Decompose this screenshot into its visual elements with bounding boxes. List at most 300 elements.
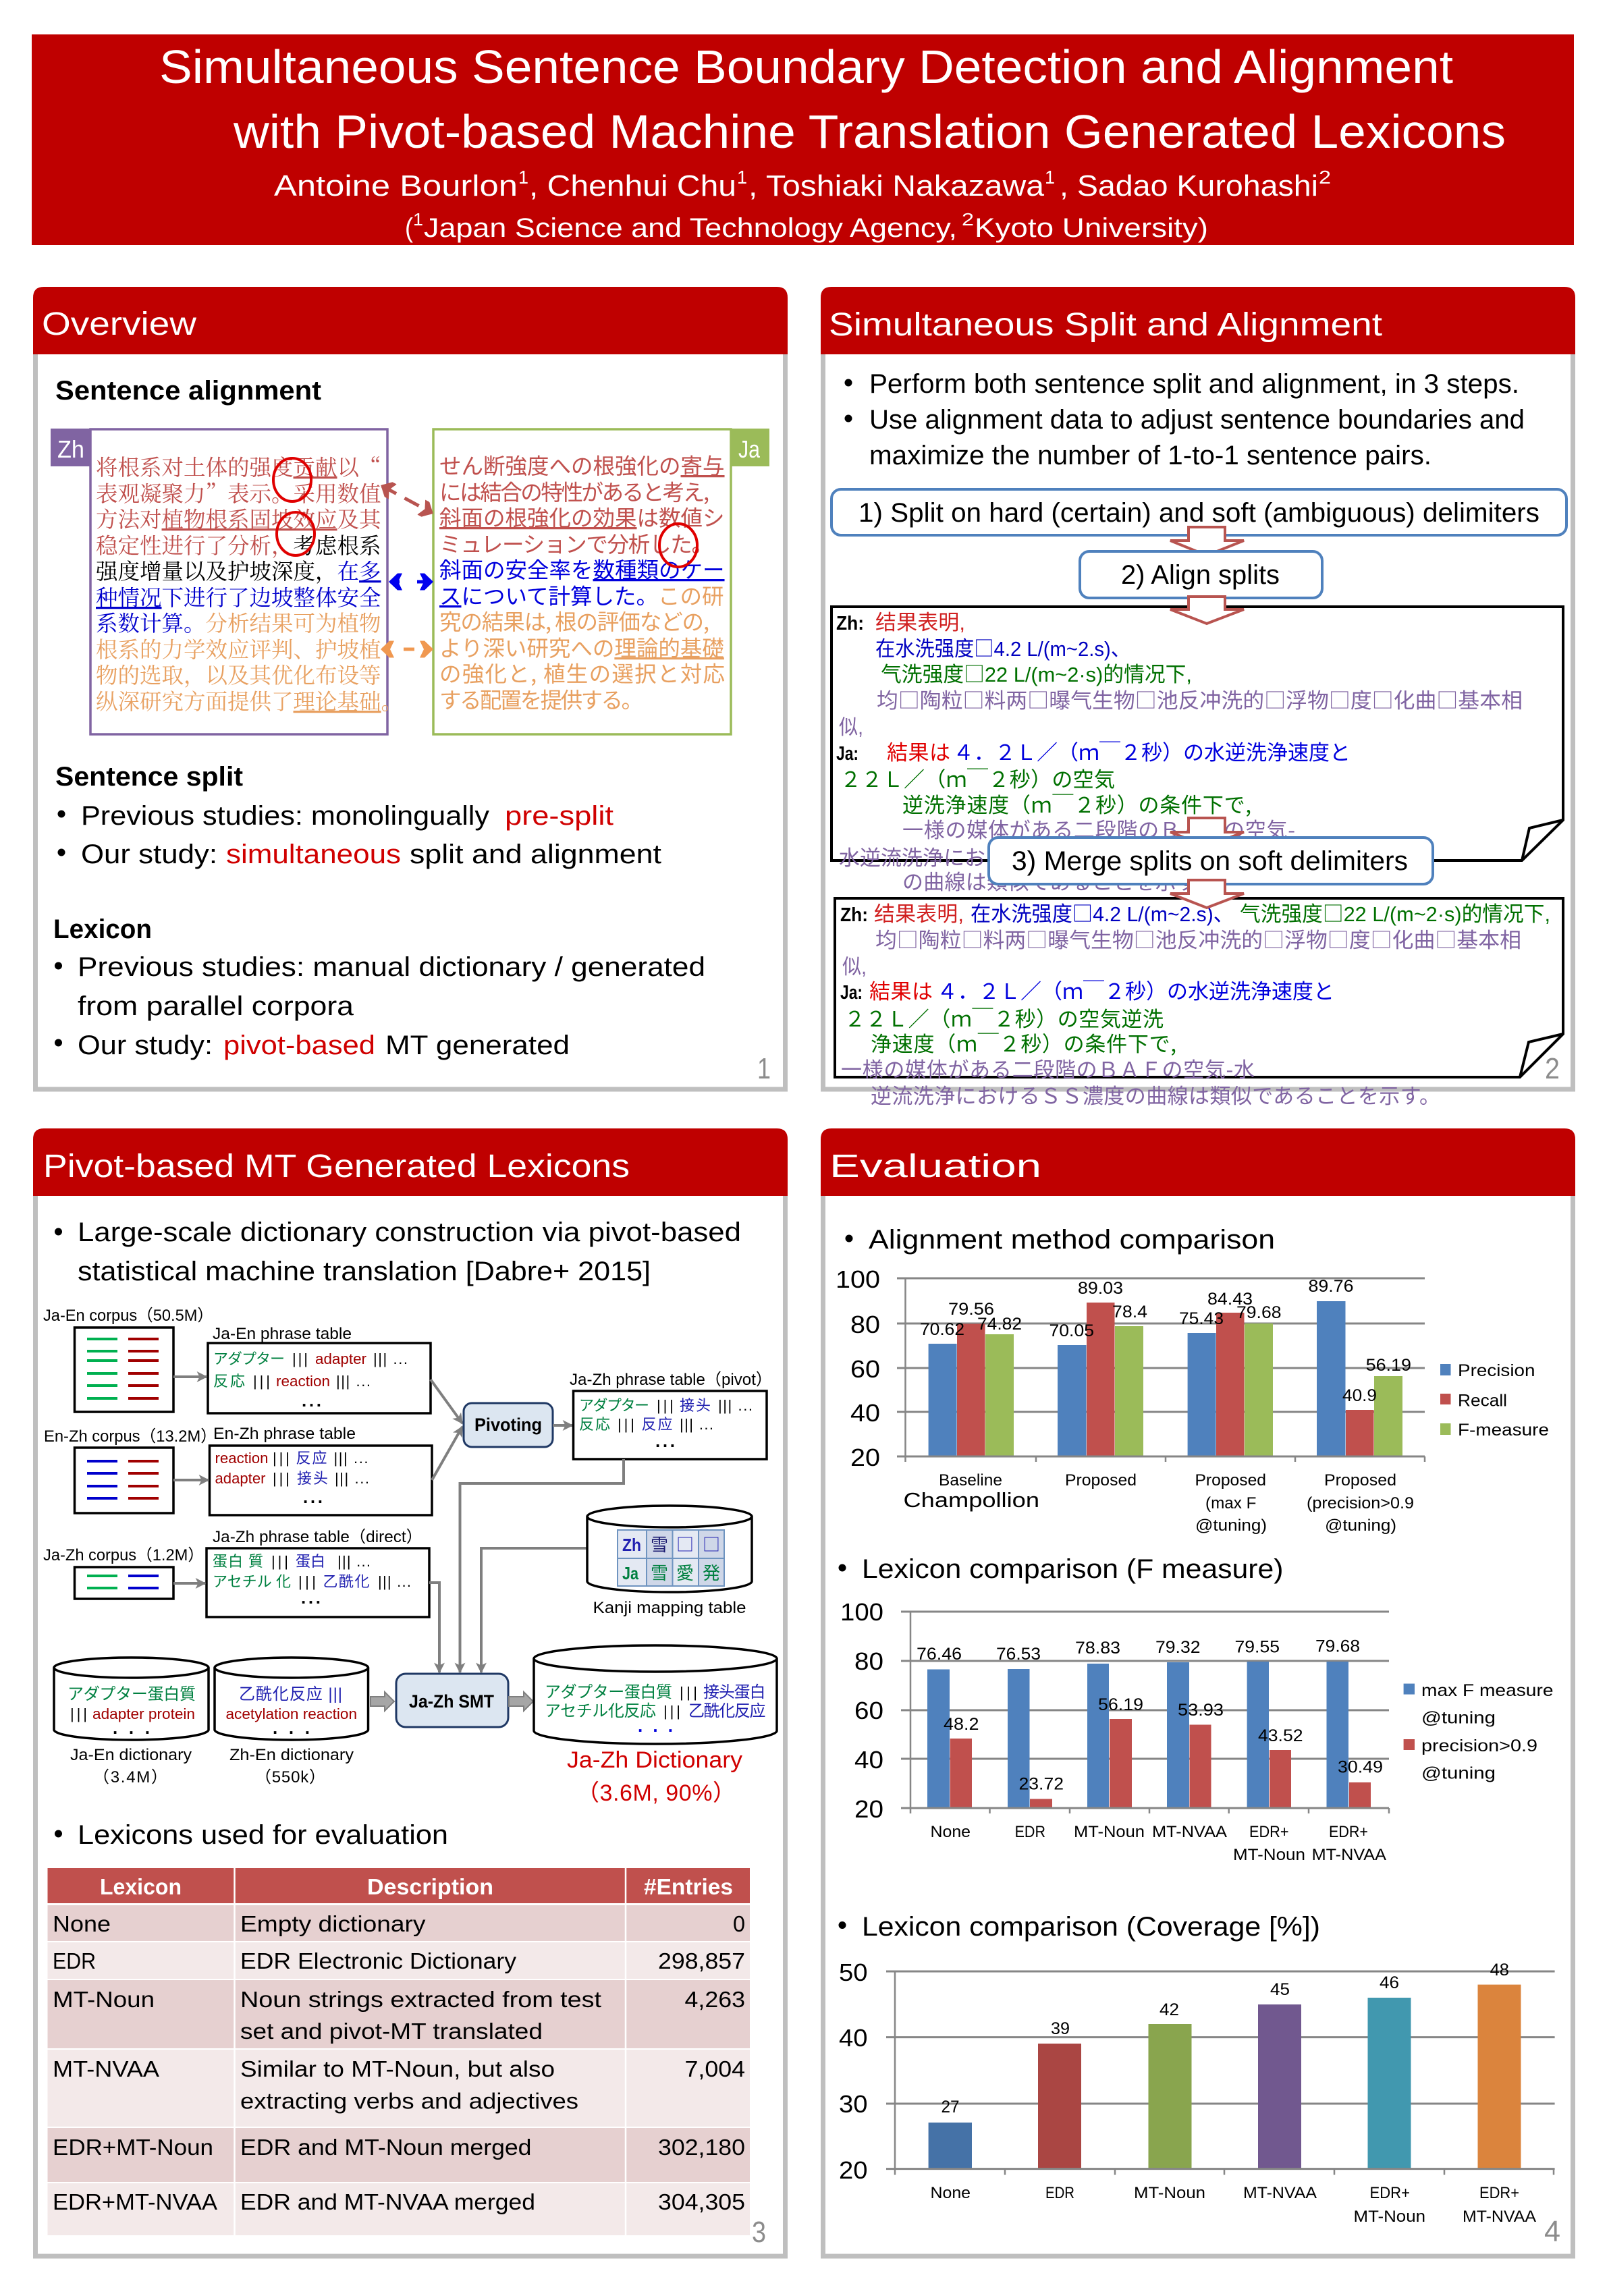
page number 3: 3	[752, 2216, 766, 2249]
bar chart: lexicon F measure	[840, 1598, 1554, 1864]
bullet: our study lexicon: MT generated	[385, 1031, 570, 1060]
document: merged splits: ２２Ｌ／（ｍ￣２秒）の空気逆洗	[844, 1002, 1164, 1033]
document: aligned splits: 在水洗强度□4.2 L/(m~2.s)、	[875, 632, 1130, 662]
y axis labels: 40	[839, 2024, 868, 2052]
panel header: overview: Overview	[42, 306, 196, 342]
Ja-Zh pivot phrase table: |||	[657, 1397, 674, 1414]
data labels: 74.82	[977, 1315, 1022, 1334]
x axis labels: EDR+	[1370, 2184, 1410, 2202]
Ja text box: 究の結果は, 根の評価などの,	[439, 605, 709, 636]
row: MT-Noun: Noun strings extracted from test	[240, 1987, 601, 2012]
Ja-Zh direct phrase table: ||| ...	[337, 1553, 371, 1570]
Zh text box: Zh	[57, 435, 84, 463]
y axis labels	[840, 1598, 883, 1823]
Ja-Zh pivot phrase table: ||| ...	[680, 1416, 713, 1433]
data labels: 84.43	[1207, 1290, 1253, 1309]
document: aligned splits: の曲線は類似であることを示す。	[902, 865, 1216, 896]
heading: alignment method comparison: Alignment method comparison	[869, 1225, 1275, 1255]
affiliations: Japan Science and Technology Agency,	[424, 213, 957, 243]
heading: lexicon comparison coverage: Lexicon comparison (Coverage [%])	[862, 1912, 1320, 1942]
affiliations: 1	[413, 209, 423, 229]
legend	[1404, 1681, 1554, 1783]
cylinder: Zh-En dictionary: Zh-En dictionary	[229, 1746, 354, 1764]
panel header: pivot-based lexicons	[33, 1128, 788, 1196]
red circles marking boundaries	[273, 458, 697, 567]
block arrow: SMT to dictionary	[509, 1692, 533, 1711]
table header: Description	[367, 1874, 493, 1899]
Ja text box	[433, 429, 769, 734]
row: MT-Noun: set and pivot-MT translated	[240, 2019, 543, 2044]
cylinder: Zh-En dictionary: ...	[273, 1718, 310, 1738]
diagram: pivot pipeline	[43, 1307, 777, 1806]
row: EDR+MT-Noun: 302,180	[658, 2135, 745, 2160]
bullet: our study split: simultaneous	[226, 840, 401, 869]
authors: 2	[1319, 167, 1331, 188]
document: merged splits	[835, 897, 1563, 1110]
cylinder: kanji mapping table: Zh	[622, 1535, 641, 1555]
y axis labels: 60	[850, 1355, 880, 1383]
Ja-Zh pivot phrase table	[570, 1371, 772, 1459]
En-Zh phrase table	[209, 1425, 432, 1515]
page number 4: 4	[1544, 2215, 1560, 2248]
data labels: 79.32	[1155, 1638, 1200, 1657]
Ja-Zh pivot phrase table: ...	[655, 1431, 675, 1451]
document: aligned splits: 水逆流洗浄におけるＳＳ濃度	[839, 841, 1111, 871]
arrow: step 1 to 2	[1170, 527, 1244, 555]
arrows: sources into SMT	[429, 1459, 624, 1672]
arrow: pivoting to pivot table	[553, 1424, 572, 1427]
x axis labels: MT-Noun	[1134, 2184, 1205, 2202]
Ja-Zh direct phrase table: Ja-Zh phrase table（direct）	[213, 1528, 422, 1546]
x axis labels: MT-NVAA	[1463, 2208, 1536, 2226]
cylinder: kanji mapping table: □	[703, 1531, 720, 1556]
arrow: Ja-Zh corpus to table	[173, 1582, 205, 1585]
cylinder: kanji mapping table	[587, 1506, 752, 1617]
Ja-En corpus	[43, 1307, 213, 1412]
row: EDR: EDR	[53, 1948, 96, 1973]
arrow: orange alignment	[382, 648, 432, 651]
affiliations: Kyoto University)	[975, 213, 1208, 243]
document: aligned splits: 一様の媒体がある二段階のＢＡＦの空気-	[902, 813, 1295, 844]
title line 1: Simultaneous Sentence Boundary Detection and Alignment	[159, 40, 1453, 93]
panel: pivot-based MT generated lexicons	[33, 1128, 788, 2256]
cylinder: Ja-Zh dictionary: |||	[680, 1684, 697, 1701]
Ja-Zh direct phrase table: 蛋白 質	[213, 1553, 263, 1570]
En-Zh phrase table: 反应	[296, 1450, 327, 1467]
row: EDR+MT-NVAA	[47, 2183, 750, 2235]
data labels: 75.43	[1179, 1309, 1224, 1328]
row: EDR: EDR Electronic Dictionary	[240, 1948, 517, 1973]
authors: 1	[1045, 167, 1055, 188]
data labels: 76.53	[996, 1645, 1041, 1664]
cylinder: Zh-En dictionary: acetylation reaction	[225, 1705, 357, 1722]
data labels: 89.76	[1308, 1277, 1354, 1296]
document: merged splits: 結果は	[869, 975, 933, 1005]
cylinder: Ja-Zh dictionary: |||	[663, 1703, 680, 1720]
En-Zh corpus: En-Zh corpus（13.2M）	[44, 1427, 217, 1446]
authors: , Toshiaki Nakazawa	[748, 169, 1045, 202]
bullets: method description: Perform both sentence split and alignment, in 3 steps.	[869, 369, 1519, 399]
x axis labels: EDR+	[1249, 1823, 1289, 1841]
cylinder: kanji mapping table: 雪	[651, 1563, 668, 1583]
y axis labels: 100	[840, 1598, 883, 1626]
panel header: evaluation	[821, 1128, 1575, 1196]
data labels: 89.03	[1078, 1279, 1123, 1298]
table header: #Entries	[644, 1874, 733, 1899]
Zh text box: 根系的力学效应评判、护坡植	[96, 633, 381, 664]
cylinder: Ja-Zh dictionary: ...	[638, 1716, 673, 1736]
Ja-Zh SMT box: Ja-Zh SMT	[409, 1691, 494, 1712]
Zh text box: 将根系对土体的强度贡献以“	[96, 451, 381, 482]
panel: simultaneous split and alignment	[821, 287, 1575, 1110]
arrow: step 2 to document	[1170, 597, 1244, 624]
cylinder: Ja-En dictionary: ...	[113, 1718, 150, 1738]
legend: Recall	[1458, 1392, 1507, 1411]
data labels	[920, 1277, 1411, 1405]
Ja-En phrase table: ||| ...	[336, 1373, 371, 1390]
data labels: 23.72	[1019, 1775, 1064, 1794]
bullet: previous studies split: pre-split	[505, 801, 613, 831]
Ja text box: の強化と, 植生の選択と対応	[439, 657, 725, 688]
bullet: our study split	[58, 840, 661, 869]
Zh text box: 方法对植物根系固坡效应及其	[96, 503, 382, 534]
document: merged splits: 一様の媒体がある二段階のＢＡＦの空気-水	[841, 1053, 1255, 1083]
step 1 box: 1) Split on hard (certain) and soft (ambiguous) delimiters	[858, 498, 1539, 528]
bullet: lexicons used: Lexicons used for evaluation	[78, 1820, 448, 1850]
dictionary size label: Ja-Zh Dictionary	[567, 1747, 742, 1773]
data labels: 78.4	[1112, 1303, 1147, 1321]
row: EDR+MT-Noun	[47, 2128, 750, 2182]
x axis labels: None	[930, 2184, 971, 2202]
Ja-En phrase table: アダプター	[213, 1350, 285, 1367]
y axis labels: 20	[850, 1444, 880, 1471]
panel: evaluation	[821, 1128, 1575, 2256]
row: EDR+MT-NVAA: EDR and MT-NVAA merged	[240, 2189, 535, 2214]
panel header: overview	[33, 287, 788, 354]
x axis labels: MT-Noun	[1074, 1823, 1145, 1841]
Ja text box: 斜面の根強化の効果は数値シ	[439, 501, 725, 532]
bullet: our study lexicon	[55, 1031, 570, 1060]
arrow: document to step 3	[1170, 818, 1244, 846]
data labels: 43.52	[1258, 1726, 1303, 1745]
panel: overview	[33, 287, 788, 1089]
cylinder: Ja-En dictionary: Ja-En dictionary	[70, 1746, 192, 1764]
document: merged splits: 似,	[842, 955, 867, 979]
En-Zh phrase table: ...	[303, 1487, 323, 1507]
En-Zh phrase table: |||	[273, 1450, 290, 1467]
bar chart: alignment methods	[836, 1265, 1549, 1535]
data labels: 70.62	[920, 1320, 964, 1339]
cylinder: Ja-Zh dictionary: アセチル化反応	[545, 1702, 656, 1720]
Ja-Zh pivot phrase table: 接头	[680, 1397, 711, 1414]
y axis labels: 100	[836, 1265, 880, 1293]
y axis labels: 20	[839, 2156, 868, 2184]
y axis labels: 50	[839, 1959, 868, 1986]
page number 1: 1	[757, 1052, 771, 1085]
cylinder: Zh-En dictionary: 乙酰化反应 |||	[239, 1685, 342, 1703]
x axis labels: EDR	[1015, 1823, 1045, 1841]
document: aligned splits	[831, 607, 1563, 896]
row: EDR	[47, 1942, 750, 1979]
pivoting box	[464, 1403, 553, 1447]
Ja-Zh pivot phrase table: 反応	[579, 1416, 610, 1433]
x axis labels: Baseline	[939, 1471, 1002, 1489]
Zh text box: 稳定性进行了分析，考虑根系	[96, 529, 381, 560]
step 3 box: 3) Merge splits on soft delimiters	[1012, 846, 1408, 876]
data labels: 79.55	[1235, 1637, 1280, 1656]
row: EDR+MT-Noun: EDR and MT-Noun merged	[240, 2135, 532, 2160]
dictionary size label: （3.6M, 90%）	[576, 1780, 736, 1806]
x axis labels: @tuning)	[1325, 1516, 1396, 1535]
bullets: method description: maximize the number of 1-to-1 sentence pairs.	[869, 441, 1431, 470]
En-Zh phrase table: reaction	[215, 1450, 269, 1467]
cylinder: Ja-Zh dictionary: 接头蛋白	[703, 1683, 765, 1701]
table: lexicons	[47, 1868, 750, 2235]
Ja-Zh pivot phrase table: Ja-Zh phrase table（pivot）	[570, 1371, 772, 1389]
document: aligned splits: 似,	[839, 715, 863, 739]
Ja-En phrase table: ...	[302, 1390, 321, 1411]
Ja-En phrase table: reaction	[276, 1373, 330, 1390]
step 2 box	[1080, 551, 1322, 598]
y axis labels: 40	[854, 1746, 883, 1774]
x axis labels	[903, 1471, 1414, 1535]
Ja-Zh direct phrase table: 蛋白	[296, 1553, 325, 1570]
heading: sentence split: Sentence split	[55, 762, 243, 792]
En-Zh phrase table: ||| ...	[333, 1450, 369, 1467]
cylinder: kanji mapping table: Kanji mapping table	[593, 1599, 746, 1617]
x axis labels	[930, 1823, 1386, 1864]
affiliations	[405, 209, 1208, 243]
Ja-Zh direct phrase table: ||| ...	[378, 1573, 411, 1590]
Ja-En phrase table: ||| ...	[373, 1350, 408, 1367]
arrow: blue alignment	[390, 580, 432, 583]
x axis labels: MT-Noun	[1233, 1846, 1305, 1864]
document: aligned splits: 结果表明,	[875, 611, 965, 634]
Ja-En corpus: Ja-En corpus（50.5M）	[43, 1307, 213, 1325]
document: aligned splits: ４．２Ｌ／（ｍ￣２秒）の水逆洗浄速度と	[953, 736, 1351, 766]
cylinder: Ja-Zh dictionary: アダプター蛋白質	[545, 1683, 672, 1701]
data labels: 46	[1380, 1973, 1399, 1992]
bars	[927, 1662, 1371, 1808]
document: aligned splits: ２２Ｌ／（ｍ￣２秒）の空気	[840, 763, 1115, 793]
Ja-Zh direct phrase table: ...	[301, 1587, 321, 1608]
y axis labels	[836, 1265, 880, 1471]
authors: , Chenhui Chu	[529, 169, 736, 202]
Ja-Zh pivot phrase table: ||| ...	[718, 1397, 753, 1414]
x axis labels: MT-NVAA	[1243, 2184, 1317, 2202]
heading: lexicon: Lexicon	[53, 914, 152, 944]
cylinder: Ja-En dictionary	[54, 1658, 209, 1786]
Ja text box: ミュレーションで分析した。	[439, 527, 713, 559]
Zh text box: 纵深研究方面提供了理论基础。	[96, 685, 403, 716]
data labels: 76.46	[917, 1645, 962, 1664]
cylinder: kanji mapping table: 愛	[676, 1563, 694, 1583]
authors: 1	[518, 167, 528, 188]
data labels: 56.19	[1366, 1356, 1411, 1375]
Ja-En phrase table: adapter	[315, 1350, 366, 1367]
En-Zh corpus	[44, 1427, 217, 1513]
Ja-Zh direct phrase table	[207, 1528, 429, 1617]
Ja-En phrase table	[208, 1325, 431, 1413]
Zh text box: 强度增量以及护坡深度，在多	[96, 555, 381, 586]
panel header: split and alignment	[821, 287, 1575, 354]
En-Zh phrase table: En-Zh phrase table	[213, 1425, 356, 1443]
document: merged splits: 均□陶粒□料两□曝气生物□池反冲洗的□浮物□度□化曲□基本相	[875, 923, 1521, 954]
legend: @tuning	[1421, 1764, 1496, 1783]
legend: F-measure	[1458, 1421, 1549, 1440]
document: merged splits: 逆流洗浄におけるＳＳ濃度の曲線は類似であることを示す。	[871, 1079, 1440, 1110]
document: merged splits: 浄速度（ｍ￣２秒）の条件下で,	[871, 1027, 1176, 1058]
heading: sentence alignment: Sentence alignment	[55, 376, 321, 406]
row: MT-NVAA	[47, 2050, 750, 2127]
data labels: 40.9	[1342, 1386, 1377, 1405]
row: MT-Noun: 4,263	[684, 1987, 745, 2012]
heading: lexicon comparison F measure: Lexicon comparison (F measure)	[862, 1554, 1284, 1584]
cylinder: Ja-Zh dictionary: 乙酰化反应	[688, 1702, 765, 1720]
document: aligned splits: 均□陶粒□料两□曝气生物□池反冲洗的□浮物□度□化曲□基本相	[877, 684, 1523, 714]
document: merged splits: 结果表明,	[874, 902, 964, 926]
Ja-En phrase table: |||	[253, 1373, 270, 1390]
row: EDR+MT-Noun: EDR+MT-Noun	[53, 2135, 213, 2160]
document: aligned splits: Ja:	[836, 743, 858, 765]
En-Zh phrase table: 接头	[297, 1470, 328, 1487]
Zh text box: 物的选取，以及其优化布设等	[96, 659, 381, 690]
document: aligned splits: 逆洗浄速度（ｍ￣２秒）の条件下で,	[902, 788, 1251, 819]
cylinder: Ja-En dictionary: |||	[70, 1705, 87, 1722]
Ja text box: Ja	[738, 435, 761, 463]
row: MT-NVAA: Similar to MT-Noun, but also	[240, 2056, 555, 2081]
Ja-Zh pivot phrase table: |||	[618, 1416, 634, 1433]
Ja text box: より深い研究への理論的基礎	[439, 631, 724, 663]
bullet: large-scale dictionary	[55, 1218, 741, 1286]
Zh text box: 系数计算。分析结果可为植物	[96, 607, 381, 638]
x axis labels: @tuning)	[1195, 1516, 1267, 1535]
row: None: 0	[733, 1911, 745, 1936]
Ja-Zh direct phrase table: 乙酰化	[323, 1573, 370, 1590]
data labels: 79.56	[948, 1300, 994, 1319]
y axis labels: 80	[850, 1311, 880, 1338]
Ja-Zh corpus: Ja-Zh corpus（1.2M）	[43, 1546, 204, 1564]
Ja text box: せん断強度への根強化の寄与	[439, 449, 725, 481]
row: None	[47, 1905, 750, 1941]
bullets: method description	[845, 369, 1525, 470]
data labels: 27	[941, 2098, 960, 2116]
bullet: previous studies split: Previous studies: monolingually	[81, 801, 489, 831]
y axis labels: 80	[854, 1647, 883, 1675]
x axis labels: Proposed	[1195, 1471, 1266, 1489]
data labels: 48	[1490, 1961, 1509, 1979]
row: None: Empty dictionary	[240, 1911, 426, 1936]
document: aligned splits: Zh:	[836, 613, 864, 634]
title line 2: with Pivot-based Machine Translation Generated Lexicons	[233, 105, 1506, 158]
document: merged splits: 在水洗强度□4.2 L/(m~2.s)、	[971, 897, 1234, 927]
arrow: En-Zh corpus to table	[173, 1479, 209, 1481]
arrows: phrase tables to pivoting	[431, 1379, 462, 1480]
Ja-Zh direct phrase table: アセチル 化	[213, 1573, 291, 1590]
y axis labels	[839, 1959, 868, 2184]
x axis labels: Proposed	[1065, 1471, 1137, 1489]
cylinder: Zh-En dictionary: （550k）	[255, 1768, 325, 1786]
data labels: 48.2	[944, 1715, 979, 1734]
authors: Antoine Bourlon	[274, 169, 518, 202]
document: merged splits: Ja:	[840, 982, 863, 1004]
row: MT-NVAA: 7,004	[684, 2056, 745, 2081]
row: MT-NVAA: MT-NVAA	[53, 2056, 159, 2081]
document: aligned splits: 結果は	[887, 736, 950, 766]
data labels: 42	[1160, 2000, 1179, 2019]
Ja text box: 斜面の安全率を数種類のケー	[439, 553, 725, 584]
x axis labels: EDR+	[1329, 1823, 1368, 1841]
x axis labels: MT-NVAA	[1152, 1823, 1227, 1841]
bullet: previous studies split	[58, 801, 613, 831]
Ja-En phrase table: 反応	[213, 1373, 245, 1390]
x axis labels: (precision>0.9	[1307, 1494, 1414, 1512]
row: MT-Noun: MT-Noun	[53, 1987, 155, 2012]
panel header: evaluation: Evaluation	[829, 1149, 1041, 1184]
cylinder: Ja-En dictionary: adapter protein	[92, 1705, 195, 1722]
row: MT-NVAA: extracting verbs and adjectives	[240, 2088, 578, 2114]
bullet: previous studies lexicon	[55, 952, 705, 1021]
cylinder: Ja-En dictionary: アダプター蛋白質	[67, 1685, 196, 1703]
x axis labels: MT-NVAA	[1312, 1846, 1386, 1864]
row: EDR+MT-NVAA: EDR+MT-NVAA	[53, 2189, 217, 2214]
step 1 box	[831, 489, 1566, 535]
panel header: pivot-based lexicons: Pivot-based MT Generated Lexicons	[43, 1149, 630, 1184]
Zh text box: 表观凝聚力”表示。采用数值	[96, 477, 381, 508]
bar chart: lexicon coverage	[839, 1959, 1555, 2226]
authors: 1	[737, 167, 747, 188]
data labels: 53.93	[1178, 1701, 1224, 1720]
cylinder: Ja-En dictionary: （3.4M）	[93, 1768, 167, 1786]
data labels: 79.68	[1236, 1303, 1281, 1322]
cylinder: Ja-Zh dictionary	[534, 1645, 777, 1744]
y axis labels: 20	[854, 1795, 883, 1823]
data labels: 79.68	[1315, 1637, 1360, 1656]
y axis labels: 40	[850, 1399, 880, 1427]
row: EDR+MT-NVAA: 304,305	[658, 2189, 745, 2214]
arrow: step 3 to merged document	[1170, 880, 1244, 908]
y axis labels: 60	[854, 1697, 883, 1724]
data labels: 56.19	[1098, 1695, 1143, 1714]
legend: Precision	[1458, 1361, 1535, 1380]
x axis labels: Champollion	[903, 1488, 1039, 1512]
Ja-Zh pivot phrase table: アダプター	[579, 1397, 649, 1414]
data labels: 30.49	[1338, 1758, 1383, 1777]
cylinder: kanji mapping table: 雪	[651, 1535, 668, 1555]
table header: Lexicon	[100, 1874, 182, 1899]
legend	[1440, 1361, 1549, 1440]
bullet: our study lexicon: pivot-based	[223, 1031, 375, 1060]
authors: , Sadao Kurohashi	[1060, 169, 1318, 202]
Zh text box: 种情况下进行了边坡整体安全	[96, 581, 381, 612]
cylinder: Zh-En dictionary	[215, 1658, 369, 1786]
Ja-En phrase table: Ja-En phrase table	[213, 1325, 352, 1343]
bullet: our study split: split and alignment	[410, 840, 661, 869]
bullet: large-scale dictionary: Large-scale dictionary construction via pivot-based	[78, 1218, 741, 1247]
title banner	[32, 34, 1574, 245]
data labels: 78.83	[1075, 1639, 1120, 1658]
legend: max F measure	[1421, 1681, 1554, 1700]
x axis labels	[930, 2184, 1536, 2226]
cylinder: kanji mapping table: Ja	[622, 1563, 638, 1583]
document: merged splits: ４．２Ｌ／（ｍ￣２秒）の水逆洗浄速度と	[937, 975, 1334, 1005]
y axis labels: 30	[839, 2090, 868, 2118]
affiliations: (	[405, 213, 414, 243]
Ja-Zh direct phrase table: |||	[298, 1573, 316, 1590]
bullet: previous studies lexicon: from parallel corpora	[78, 991, 354, 1021]
Ja text box: には結合の特性があると考え,	[439, 475, 709, 507]
data labels	[917, 1637, 1383, 1794]
